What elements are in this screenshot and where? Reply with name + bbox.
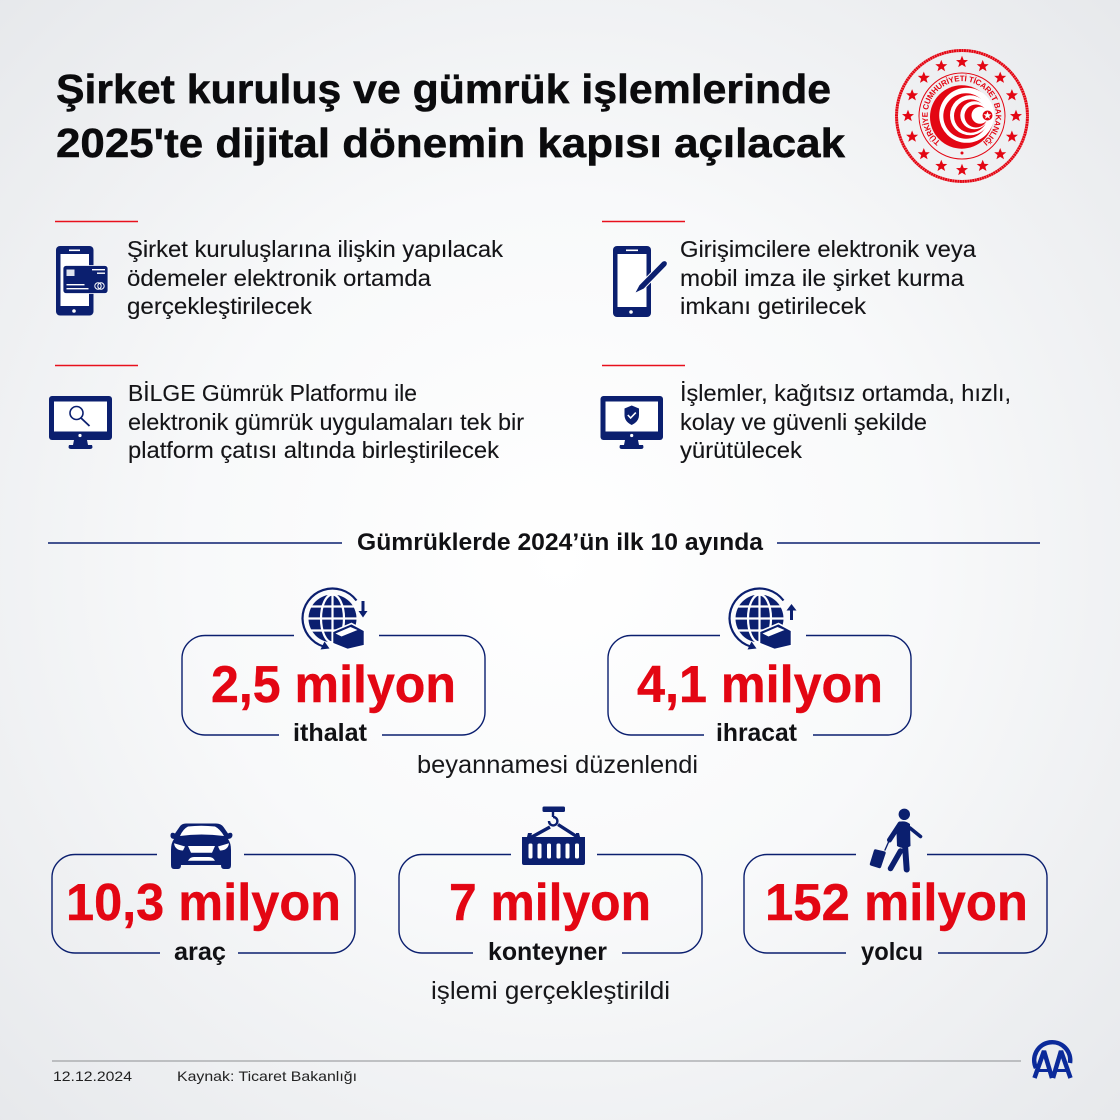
- stat: araç: araç: [174, 938, 226, 966]
- icon: globe export: [730, 588, 796, 650]
- panel: electronic payments: [55, 222, 503, 319]
- text: Girişimcilere elektronik veya: [680, 236, 977, 262]
- caption: işlemi: işlemi gerçekleştirildi: [431, 977, 670, 1005]
- stat: ihracat: [608, 588, 911, 747]
- text: elektronik gümrük uygulamaları tek bir: [128, 409, 524, 435]
- stat: ihracat: ihracat: [716, 719, 798, 747]
- stat: araç: [52, 824, 355, 966]
- stat: araç: 10,3 milyon: [66, 874, 341, 932]
- title: 2025'te dijital dönemin kapısı açılacak: [56, 120, 845, 166]
- title: [56, 66, 845, 166]
- icon: monitor with magnifier: [49, 396, 112, 449]
- caption: beyanname: beyannamesi düzenlendi: [417, 751, 698, 779]
- panel: electronic signature: [602, 222, 977, 319]
- text: platform çatısı altında birleştirilecek: [128, 437, 499, 463]
- seal text: TÜRKİYE CUMHURİYETİ TİCARET BAKANLIĞI: [922, 74, 1002, 146]
- section heading: Gümrüklerde 2024’ün ilk 10 ayında: [357, 529, 764, 556]
- text: gerçekleştirilecek: [127, 293, 312, 319]
- panel: paperless processes: [600, 366, 1011, 463]
- stat: yolcu: yolcu: [861, 938, 923, 966]
- stat: ihracat: 4,1 milyon: [637, 656, 883, 714]
- text: kolay ve güvenli şekilde: [680, 409, 927, 435]
- title: Şirket kuruluş ve gümrük işlemlerinde: [56, 66, 831, 112]
- icon: monitor with shield: [600, 396, 663, 449]
- stat: yolcu: [744, 809, 1047, 966]
- icon: car: [170, 824, 232, 869]
- stat: yolcu: 152 milyon: [765, 874, 1028, 932]
- icon: container on hook: [522, 806, 585, 865]
- panel: BİLGE customs platform: [49, 366, 524, 463]
- stat: ithalat: [182, 588, 485, 747]
- icon: phone with credit card: [56, 246, 108, 316]
- text: [680, 380, 1011, 463]
- text: [127, 236, 503, 319]
- text: yürütülecek: [680, 437, 802, 463]
- footer: [52, 1061, 1021, 1084]
- icon: globe import: [302, 588, 368, 650]
- stat: ithalat: 2,5 milyon: [211, 656, 456, 714]
- text: Şirket kuruluşlarına ilişkin yapılacak: [127, 236, 503, 262]
- text: [128, 380, 524, 463]
- text: [680, 236, 977, 319]
- stat: konteyner: 7 milyon: [449, 874, 651, 932]
- footer: 12.12.2024: [53, 1068, 132, 1084]
- text: İşlemler, kağıtsız ortamda, hızlı,: [680, 380, 1011, 406]
- logo: Ticaret Bakanlığı seal: [895, 49, 1029, 183]
- text: BİLGE Gümrük Platformu ile: [128, 380, 417, 406]
- icon: traveller with suitcase: [872, 809, 920, 870]
- icon: phone with pen: [613, 246, 667, 317]
- text: mobil imza ile şirket kurma: [680, 265, 965, 291]
- footer: Kaynak: Ticaret Bakanlığı: [177, 1068, 357, 1084]
- stat: konteyner: [399, 806, 702, 966]
- text: ödemeler elektronik ortamda: [127, 265, 432, 291]
- stat: konteyner: konteyner: [488, 938, 607, 966]
- text: imkanı getirilecek: [680, 293, 866, 319]
- stat: ithalat: ithalat: [293, 719, 368, 747]
- logo: AA: [1034, 1042, 1070, 1078]
